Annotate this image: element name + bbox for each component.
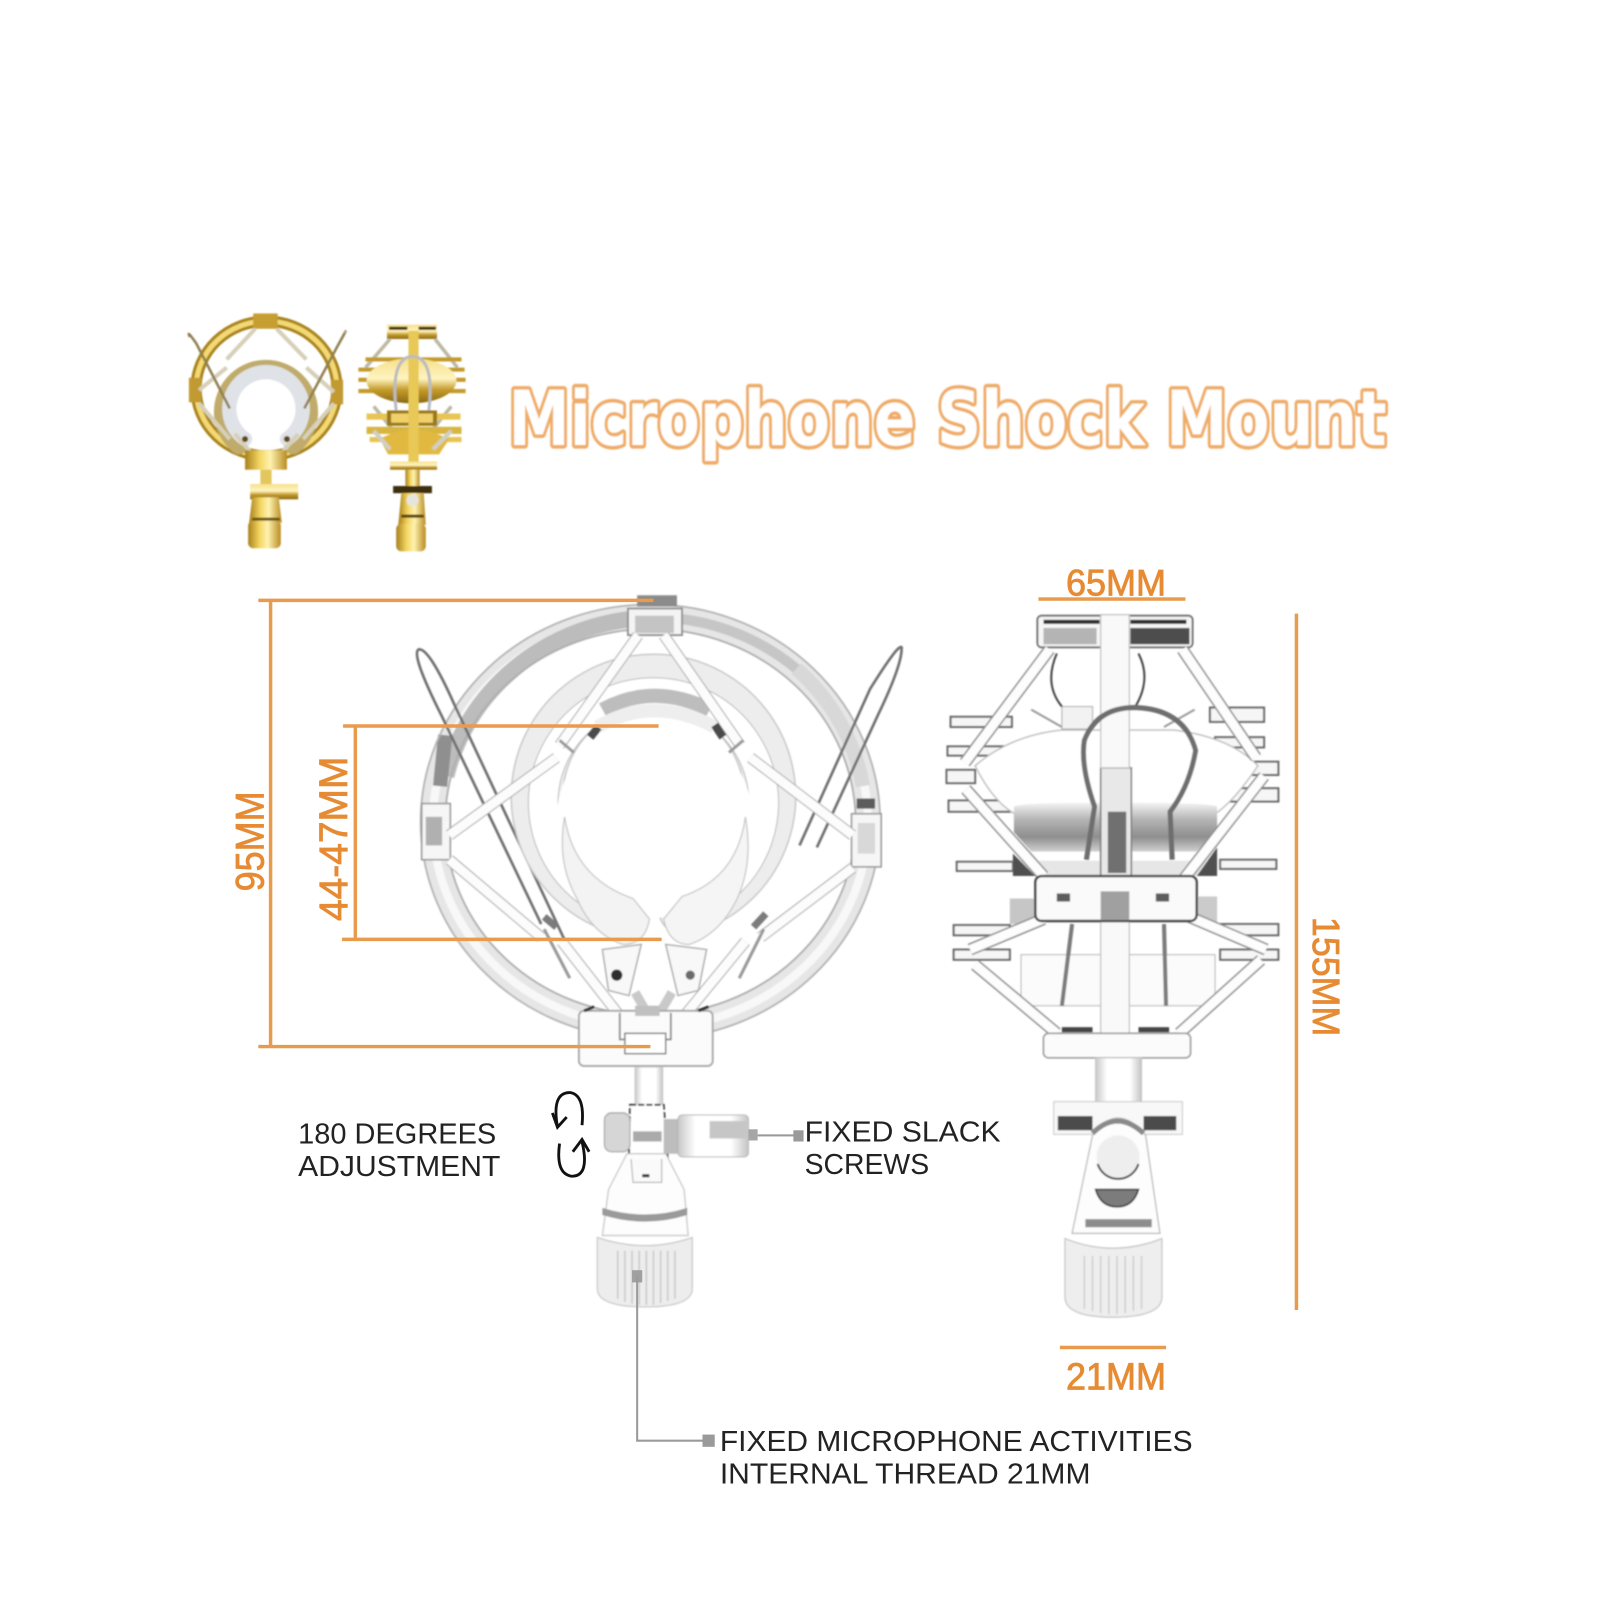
cushion clip xyxy=(537,680,770,909)
outer suspension ring xyxy=(421,604,880,1039)
label: 180 degrees adjustment: ADJUSTMENT xyxy=(298,1151,500,1183)
dimension: 44-47MM xyxy=(312,726,662,939)
dimension: 155MM: 155MM xyxy=(1304,917,1346,1036)
dimension: 95MM xyxy=(228,600,653,1047)
spring loop xyxy=(1083,708,1196,860)
dark inner column xyxy=(1101,768,1131,880)
label: 180 degrees adjustment: 180 DEGREES xyxy=(298,1119,496,1151)
label: 180 degrees adjustment xyxy=(298,1119,500,1183)
ring blocks xyxy=(422,595,881,867)
label: fixed slack screws xyxy=(805,1117,1001,1181)
label: fixed slack screws: SCREWS xyxy=(805,1149,929,1181)
bottom bar xyxy=(1044,1027,1191,1058)
icon: rotation arrows xyxy=(552,1093,589,1176)
dimension: 21MM: 21MM xyxy=(1066,1357,1166,1399)
bottom clamp xyxy=(579,1006,713,1066)
title: Microphone Shock Mount xyxy=(508,375,1387,463)
center column xyxy=(1101,615,1129,1062)
label: fixed microphone activities internal thread 21mm: INTERNAL THREAD 21MM xyxy=(720,1459,1090,1491)
elastic struts xyxy=(449,635,853,1044)
dimension: 65MM: 65MM xyxy=(1066,562,1166,603)
icon: gold shock mount side view xyxy=(358,325,466,551)
callout leader: internal thread xyxy=(632,1270,715,1447)
capsule body xyxy=(975,707,1258,1006)
label: fixed microphone activities internal thread 21mm xyxy=(720,1426,1193,1491)
dimension: 65MM xyxy=(1038,562,1185,603)
elastic struts xyxy=(965,649,1266,1033)
cooling fins xyxy=(947,708,1278,960)
wire clip behind xyxy=(1051,653,1144,707)
wire loops xyxy=(417,647,902,944)
clip prongs xyxy=(602,944,707,1017)
icon: silver shock mount front view xyxy=(417,595,902,1307)
dimension: 44-47MM: 44-47MM xyxy=(312,757,356,921)
top bar xyxy=(1037,616,1193,647)
label: fixed microphone activities internal thread 21mm: FIXED MICROPHONE ACTIVITIES xyxy=(720,1426,1193,1458)
label: fixed slack screws: FIXED SLACK xyxy=(805,1117,1001,1149)
mount stem and thumb screw xyxy=(597,1067,748,1307)
icon: gold shock mount front view xyxy=(189,313,345,548)
dimension: 155MM xyxy=(1295,614,1346,1310)
callout leader: fixed slack screws xyxy=(748,1129,804,1142)
icon: silver shock mount side view xyxy=(947,615,1278,1317)
dimension: 95MM: 95MM xyxy=(228,791,272,891)
base stem and knob xyxy=(1054,1058,1182,1317)
cushion hole xyxy=(556,722,753,944)
lower bracket xyxy=(1035,876,1197,1006)
